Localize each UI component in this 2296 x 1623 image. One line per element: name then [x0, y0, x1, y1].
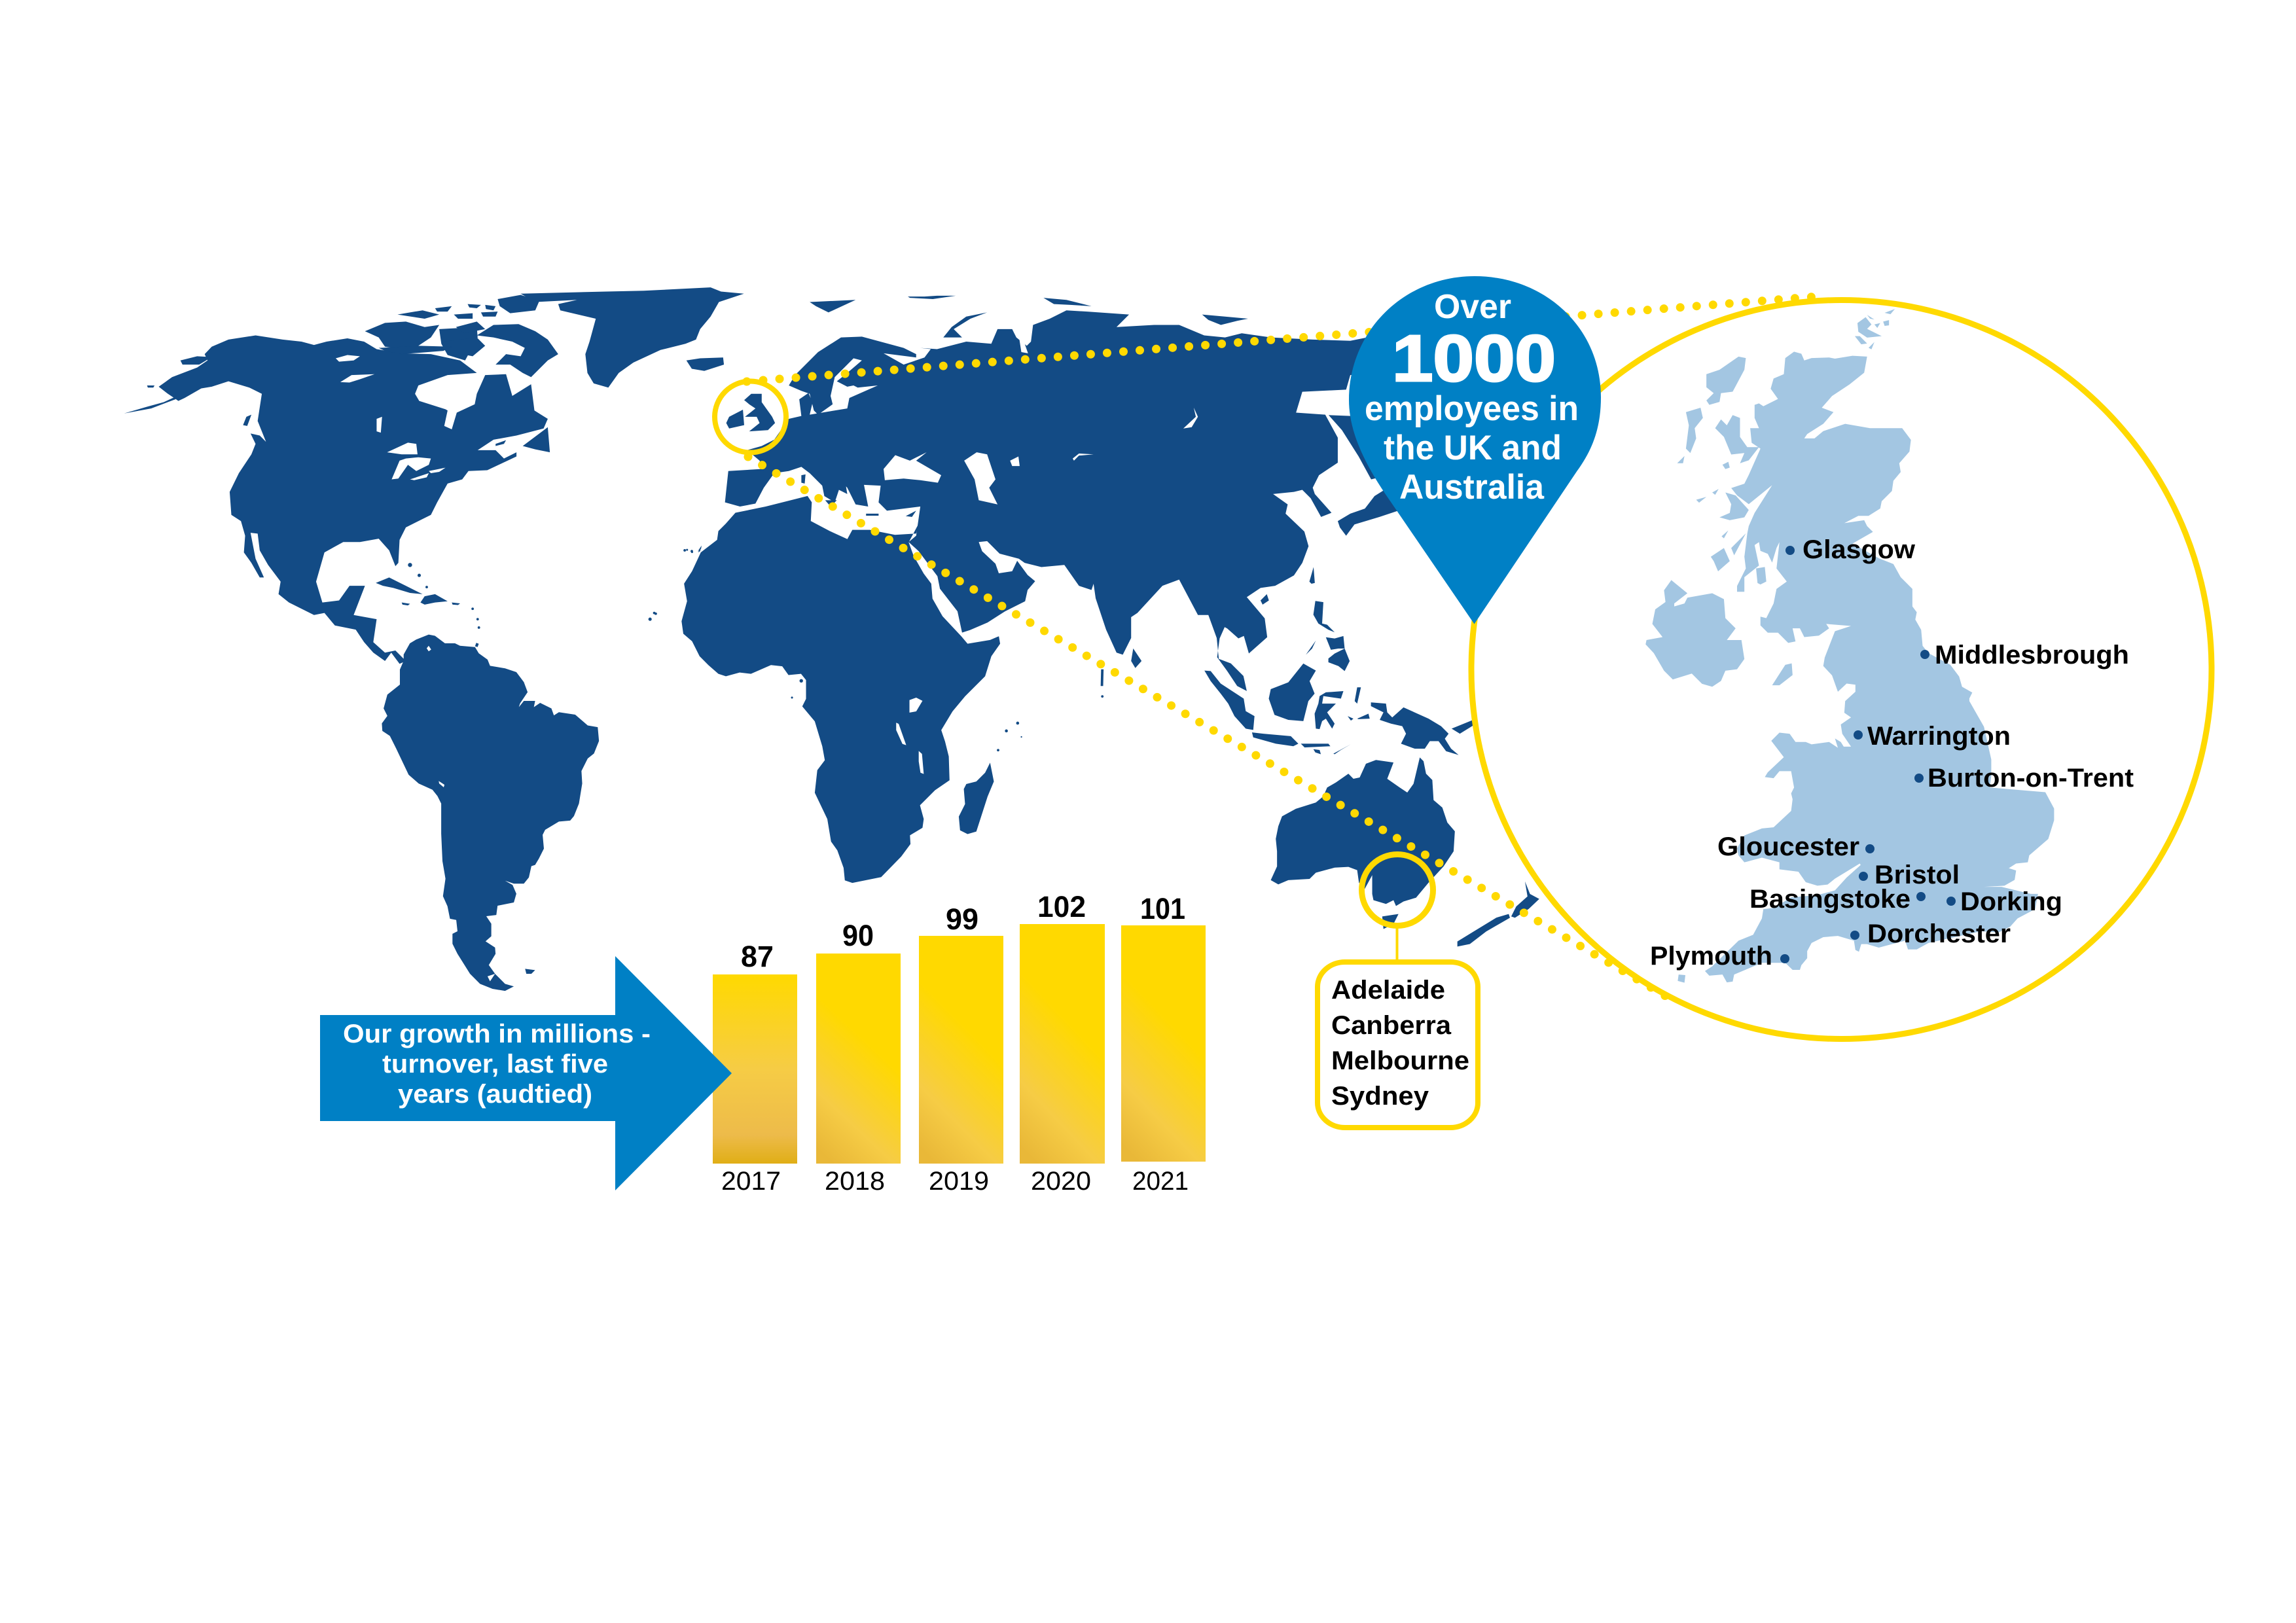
city dots [1780, 546, 1956, 963]
UK city labels: Warrington [1867, 722, 2011, 751]
callout: Australian cities [1318, 962, 1478, 1128]
callout: 1000 employees pin: 1000 [1392, 322, 1556, 395]
UK city labels: Plymouth [1650, 942, 1772, 971]
callout: 1000 employees pin [1349, 276, 1601, 624]
bar values: 90 [842, 919, 874, 952]
circle: Australia marker on world map [1361, 855, 1433, 925]
year labels: 2021 [1132, 1167, 1189, 1196]
arrow: growth label: years (audtied) [398, 1080, 592, 1109]
bar values [741, 890, 1185, 973]
UK map [1645, 309, 2054, 983]
map: north america and greenland [124, 287, 744, 664]
world map [124, 287, 1539, 991]
callout: 1000 employees pin: Australia [1399, 468, 1545, 507]
map: south america [382, 635, 599, 991]
UK city labels [1650, 535, 2134, 971]
map: eurasia [725, 296, 1408, 698]
bar values: 99 [946, 902, 978, 936]
bar values: 87 [741, 940, 774, 973]
year labels: 2018 [825, 1167, 885, 1196]
arrow: growth label: Our growth in millions - [343, 1020, 651, 1048]
bar 2021 [1121, 925, 1206, 1162]
arrow: growth label [320, 956, 732, 1190]
UK city labels: Gloucester [1717, 832, 1859, 861]
callout: Australian cities: Sydney [1331, 1082, 1429, 1111]
callout: Australian cities: Adelaide [1331, 976, 1445, 1005]
year labels: 2019 [929, 1167, 989, 1196]
year labels: 2020 [1031, 1167, 1091, 1196]
callout: 1000 employees pin: Over [1434, 288, 1511, 326]
dotted line: UK to pin and UK inset [747, 296, 1826, 382]
panel: UK inset circle [1471, 300, 2212, 1039]
bar 2017 [713, 974, 797, 1164]
UK city labels: Basingstoke [1749, 885, 1910, 914]
UK city labels: Dorking [1960, 887, 2062, 916]
UK city labels: Middlesbrough [1935, 641, 2129, 669]
map: africa [655, 496, 1022, 883]
lakes and inland seas [884, 333, 1198, 505]
bar values: 101 [1140, 892, 1185, 925]
map: south-east asia and oceania [1204, 601, 1539, 946]
callout: Australian cities: Melbourne [1331, 1046, 1469, 1075]
dotted line: UK to Australia [748, 457, 1676, 1002]
UK city labels: Bristol [1874, 861, 1960, 889]
UK city labels: Glasgow [1803, 535, 1916, 564]
bar 2019 [919, 936, 1003, 1164]
callout: 1000 employees pin: employees in [1365, 389, 1579, 428]
bar chart: turnover [713, 890, 1206, 1196]
bar values: 102 [1037, 890, 1086, 923]
callout: Australian cities: Canberra [1331, 1011, 1452, 1040]
arrow: growth label: turnover, last five [382, 1050, 608, 1079]
UK city labels: Burton-on-Trent [1928, 764, 2134, 793]
circle: UK marker on world map [715, 381, 786, 453]
connector: Australia marker to cities box [1395, 926, 1398, 962]
callout: 1000 employees pin: the UK and [1384, 429, 1562, 467]
bar 2020 [1020, 924, 1105, 1164]
bar 2018 [816, 954, 901, 1164]
UK city labels: Dorchester [1867, 919, 2011, 948]
year labels: 2017 [721, 1167, 781, 1196]
year labels [721, 1167, 1189, 1196]
